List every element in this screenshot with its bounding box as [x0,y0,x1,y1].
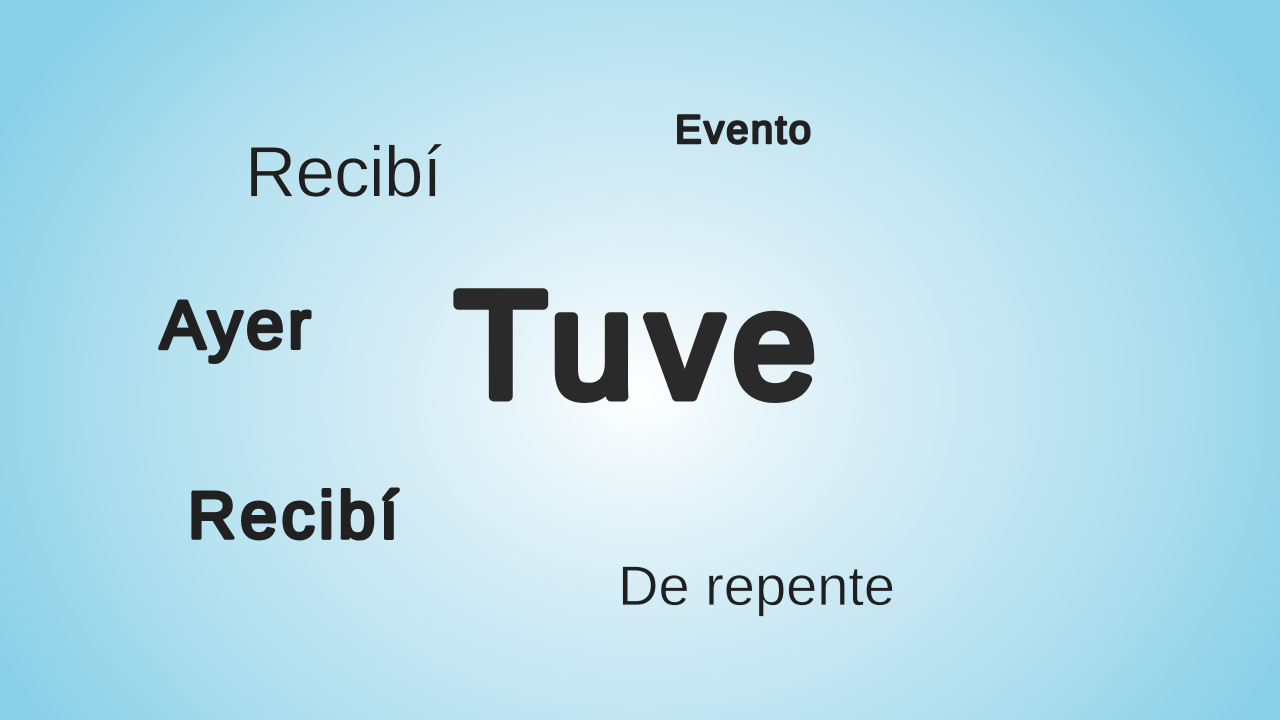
word: Recibí bold: Recibí [188,478,403,552]
word: Recibí light: Recibí [245,134,443,212]
word: De repente: De repente [618,554,895,617]
word: Ayer: Ayer [160,287,315,363]
word: Evento: Evento [675,108,813,152]
heading: Tuve: Tuve [455,260,816,428]
